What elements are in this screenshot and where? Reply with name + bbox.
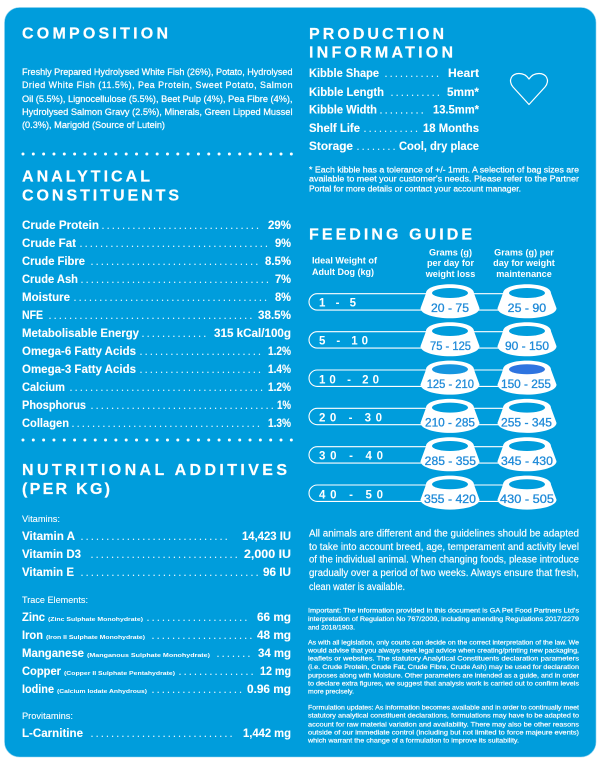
row: copper: Copper (22, 665, 61, 678)
row: 10-20 kg: 10 - 20 (319, 374, 381, 386)
row: iodine: Iodine (22, 683, 54, 696)
row: iron (22, 629, 291, 642)
row: crude fibre (22, 255, 292, 268)
row: omega-3: Omega-3 Fatty Acids (22, 363, 136, 376)
panel: feeding guide (309, 226, 556, 510)
row: crude ash: Crude Ash (22, 273, 78, 286)
text block: legislation notice (307, 639, 580, 696)
row: zinc (22, 611, 291, 624)
row: 5-10 kg: 90 - 150 (505, 339, 549, 353)
row: 5-10 kg (309, 322, 556, 356)
heading: feeding guide: FEEDING GUIDE (309, 226, 476, 244)
column header: ideal weight (312, 256, 378, 277)
text block: legislation notice: would advise that you always seek legal advice when creating/printing new packaging, (307, 647, 579, 654)
row: crude protein (22, 219, 292, 232)
text block: ingredients (22, 67, 293, 130)
text block: important notice: and 2018/1903. (308, 624, 355, 631)
heading: composition: COMPOSITION (22, 26, 172, 42)
row: crude ash: 7% (275, 273, 292, 286)
row: zinc: 66 mg (257, 611, 291, 624)
row: phosphorus (22, 399, 291, 412)
column header: weight loss: weight loss (425, 269, 475, 279)
column header: ideal weight: Adult Dog (kg) (312, 267, 374, 277)
row: nfe: 38.5% (258, 309, 292, 322)
text block: feeding advice (309, 529, 580, 593)
row: nfe: NFE (22, 309, 43, 322)
row: crude fat: 9% (275, 237, 292, 250)
row: crude protein: Crude Protein (22, 219, 99, 232)
row: omega-6: 1.2% (268, 345, 292, 358)
row: metabolisable energy: Metabolisable Energy (22, 327, 139, 340)
heading: production information: INFORMATION (309, 44, 457, 62)
text block: legislation notice: to declare extra figures, we suggest that analysis work is carried out to confirm levels (308, 681, 580, 688)
row: 30-40 kg: 30 - 40 (319, 451, 385, 463)
heading: nutritional additives: NUTRITIONAL ADDITIVES (22, 462, 291, 479)
text block: formulation updates: outside of our immediate control (including but not limited to force majeure events) (308, 729, 579, 736)
row: kibble width: 13.5mm* (433, 104, 479, 117)
row: 20-30 kg (309, 399, 556, 433)
row: 1-5 kg: 1 - 5 (319, 298, 358, 310)
row: storage: Storage (309, 140, 354, 153)
row: storage: Cool, dry place (399, 140, 479, 153)
text block: legislation notice: leaflets or websites. The statutory Analytical Constituents declaration parameters (308, 655, 580, 662)
row: iron: (Iron II Sulphate Monohydrate) (46, 635, 145, 641)
row: 40-50 kg: 355 - 420 (424, 492, 476, 506)
row: crude protein: 29% (268, 219, 292, 232)
row: calcium (22, 381, 292, 394)
row: copper: 12 mg (260, 665, 291, 678)
row: vitamin a: 14,423 IU (242, 530, 291, 543)
row: vitamin a (22, 530, 291, 543)
column header: weight maintenance: day for weight (493, 258, 555, 268)
row: collagen: 1.3% (268, 417, 292, 430)
row: 1-5 kg (309, 284, 556, 318)
heading: analytical constituents: ANALYTICAL (22, 169, 154, 186)
row: 20-30 kg: 20 - 30 (319, 412, 384, 424)
row: crude fat (22, 237, 292, 250)
text block: formulation updates: statutory analytical constituent declarations, formulations may have to be adapted to (308, 713, 579, 720)
row: 1-5 kg: 20 - 75 (431, 301, 469, 315)
panel: composition (22, 26, 293, 130)
row: 1-5 kg: 25 - 90 (508, 301, 547, 315)
row: kibble shape: Kibble Shape (309, 67, 379, 80)
row: copper (22, 665, 291, 678)
text block: important notice: Important: The information provided in this document is GA Pet Food Partners Ltd's (308, 608, 580, 615)
row: crude fat: Crude Fat (22, 237, 76, 250)
row: kibble shape: Heart (448, 67, 479, 80)
row: 5-10 kg: 5 - 10 (319, 336, 370, 348)
text block: kibble tolerance note (309, 166, 580, 194)
text block: feeding advice: gradually over a period of two weeks. Always ensure that fresh, (309, 568, 579, 579)
text block: ingredients: Dried White Fish (11.5%), Pea Protein, Sweet Potato, Salmon (22, 80, 293, 90)
row: vitamin e: Vitamin E (22, 566, 74, 579)
row: iodine (22, 683, 291, 696)
row: omega-3 (22, 363, 292, 376)
text block: ingredients: Hydrolysed Salmon Gravy (2.5%), Minerals, Green Lipped Mussel (22, 107, 293, 117)
row: kibble width (309, 104, 479, 117)
row: kibble length: 5mm* (447, 86, 479, 99)
row: vitamin d3 (22, 548, 291, 561)
subheading: provitamins: Provitamins: (22, 711, 73, 721)
text block: legislation notice: more precisely. (308, 689, 354, 696)
icon: heart-shaped kibble (511, 74, 547, 104)
row: l-carnitine: 1,442 mg (243, 727, 291, 740)
row: 40-50 kg (309, 476, 556, 510)
heading: nutritional additives (22, 462, 291, 498)
text block: ingredients: (0.3%), Marigold (Source of Lutein) (22, 120, 165, 130)
panel: production information (309, 26, 580, 194)
row: 20-30 kg: 255 - 345 (501, 415, 552, 429)
row: phosphorus: 1% (277, 399, 291, 412)
text block: feeding advice: All animals are different and the guidelines should be adapted (309, 529, 579, 540)
row: shelf life (309, 122, 479, 135)
row: metabolisable energy (22, 327, 291, 340)
row: 30-40 kg: 345 - 430 (501, 454, 553, 468)
row: l-carnitine (22, 727, 291, 740)
row: iron: 48 mg (257, 629, 291, 642)
text block: formulation updates (307, 705, 580, 745)
text block: kibble tolerance note: Portal for more details or contact your account manager. (309, 185, 521, 194)
row: vitamin a: Vitamin A (22, 530, 76, 543)
heading: analytical constituents: CONSTITUENTS (22, 188, 183, 205)
row: manganese: 34 mg (258, 647, 291, 660)
row: omega-6 (22, 345, 292, 358)
text block: formulation updates: which warrant the change of a formulation to improve its suitability. (307, 738, 519, 745)
row: 10-20 kg: 125 - 210 (427, 377, 474, 391)
text block: important notice (308, 608, 580, 631)
row: shelf life: Shelf Life (309, 122, 360, 135)
column header: weight loss: Grams (g) (429, 248, 472, 258)
row: phosphorus: Phosphorus (22, 399, 86, 412)
heading: analytical constituents (22, 169, 183, 205)
row: shelf life: 18 Months (423, 122, 479, 135)
row: 10-20 kg: 150 - 255 (501, 377, 551, 391)
row: 5-10 kg: 75 - 125 (430, 339, 471, 353)
subheading: trace elements: Trace Elements: (22, 595, 88, 605)
column header: weight maintenance: Grams (g) per (494, 248, 554, 258)
column header: ideal weight: Ideal Weight of (312, 256, 378, 266)
row: iodine: (Calcium Iodate Anhydrous) (57, 689, 147, 695)
heading: production information: PRODUCTION (309, 26, 448, 43)
text block: feeding advice: clean water is available. (309, 582, 405, 593)
text block: formulation updates: Formulation updates: As information becomes available and in order to continually meet (308, 705, 579, 712)
row: manganese: (Manganous Sulphate Monohydrate) (87, 653, 210, 659)
row: 20-30 kg: 210 - 285 (425, 415, 475, 429)
row: crude fibre: 8.5% (265, 255, 292, 268)
text block: ingredients: Freshly Prepared Hydrolysed White Fish (26%), Potato, Hydrolysed (22, 67, 293, 77)
row: collagen (22, 417, 292, 430)
row: omega-3: 1.4% (268, 363, 292, 376)
row: manganese (22, 647, 291, 660)
row: zinc: (Zinc Sulphate Monohydrate) (48, 617, 143, 623)
row: iron: Iron (22, 629, 43, 642)
row: storage (309, 140, 479, 153)
row: moisture (22, 291, 292, 304)
row: 30-40 kg (309, 437, 556, 471)
row: 30-40 kg: 285 - 355 (425, 454, 476, 468)
panel: analytical constituents (22, 169, 292, 430)
row: vitamin d3: Vitamin D3 (22, 548, 81, 561)
text block: formulation updates: account for raw material variation and availability. There may also be other reasons (308, 721, 580, 728)
row: calcium: 1.2% (268, 381, 292, 394)
text block: legislation notice: purposes along with Moisture. Other parameters are intended as a guide, and in order (308, 672, 580, 679)
row: kibble length: Kibble Length (309, 86, 384, 99)
text block: important notice: interpretation of Regulation No 767/2009, including amending Regulations 2017/2279 (308, 616, 579, 623)
text block: feeding advice: of the individual animal. When changing foods, please introduce (309, 555, 580, 566)
row: copper: (Copper II Sulphate Pentahydrate) (64, 671, 175, 677)
text block: kibble tolerance note: * Each kibble has a tolerance of +/- 1mm. A selection of bag sizes are (309, 166, 580, 175)
row: collagen: Collagen (22, 417, 69, 430)
column header: weight maintenance (493, 248, 555, 279)
row: 40-50 kg: 430 - 505 (500, 492, 554, 506)
row: moisture: 8% (275, 291, 292, 304)
heading: production information (309, 26, 457, 62)
row: vitamin e: 96 IU (263, 566, 291, 579)
text block: kibble tolerance note: available to meet your customer's needs. Please refer to the Partner (309, 175, 579, 184)
row: kibble length (309, 86, 479, 99)
text block: ingredients: Oil (5.5%), Lignocellulose (5.5%), Beet Pulp (4%), Pea Fibre (4%), (22, 94, 292, 104)
row: vitamin d3: 2,000 IU (244, 548, 291, 561)
text block: legislation notice: As with all legislation, only courts can decide on the correct interpretation of the law. We (308, 639, 579, 646)
row: calcium: Calcium (22, 381, 65, 394)
row: kibble shape (309, 67, 479, 80)
row: zinc: Zinc (22, 611, 45, 624)
row: kibble width: Kibble Width (309, 104, 377, 117)
row: manganese: Manganese (22, 647, 84, 660)
text block: legislation notice: (i.e. Crude Protein, Crude Fat, Crude Fibre, Crude Ash) may be used for declaration (308, 664, 579, 671)
column header: weight loss: per day for (427, 258, 474, 268)
row: omega-6: Omega-6 Fatty Acids (22, 345, 136, 358)
row: 10-20 kg (309, 361, 556, 395)
heading: nutritional additives: (PER KG) (22, 481, 114, 498)
text block: feeding advice: to take into account breed, age, temperament and activity level (309, 542, 579, 553)
subheading: vitamins: Vitamins: (22, 514, 60, 524)
row: iodine: 0.96 mg (247, 683, 291, 696)
row: vitamin e (22, 566, 291, 579)
column header: weight maintenance: maintenance (496, 269, 552, 279)
row: moisture: Moisture (22, 291, 70, 304)
row: l-carnitine: L-Carnitine (22, 727, 83, 740)
row: nfe (22, 309, 292, 322)
panel: nutritional additives (22, 462, 291, 740)
row: metabolisable energy: 315 kCal/100g (214, 327, 291, 340)
row: 40-50 kg: 40 - 50 (319, 490, 385, 502)
row: crude fibre: Crude Fibre (22, 255, 85, 268)
column header: weight loss (425, 248, 475, 279)
row: crude ash (22, 273, 292, 286)
